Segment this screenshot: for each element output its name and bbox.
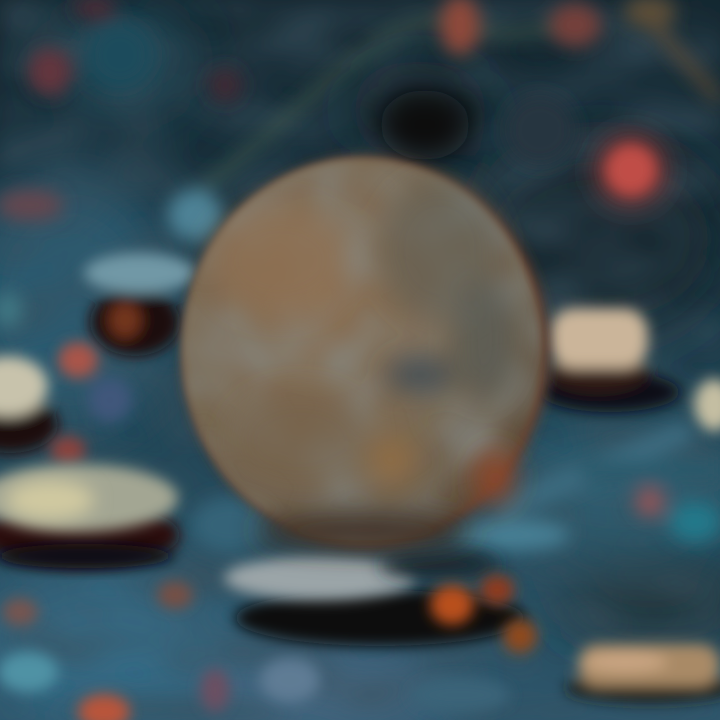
- coin stack upper left: [84, 253, 196, 356]
- right coin with shadow: [540, 308, 680, 412]
- streak lights lower right: [190, 430, 720, 553]
- dark shadow behind globe top: [380, 90, 470, 160]
- pink and red glows left: [50, 342, 132, 464]
- coin far right edge: [694, 379, 720, 431]
- globe: [170, 150, 560, 550]
- red glow: [595, 134, 667, 206]
- small glows at bottom left: [0, 581, 510, 720]
- large coin lower left: [0, 464, 180, 568]
- orange lights: [430, 575, 537, 653]
- coin left edge: [0, 356, 58, 453]
- bottom coin stack right: [565, 644, 720, 702]
- chart lines and glows at top: [0, 0, 720, 328]
- base shadow and coin under globe: [224, 551, 525, 646]
